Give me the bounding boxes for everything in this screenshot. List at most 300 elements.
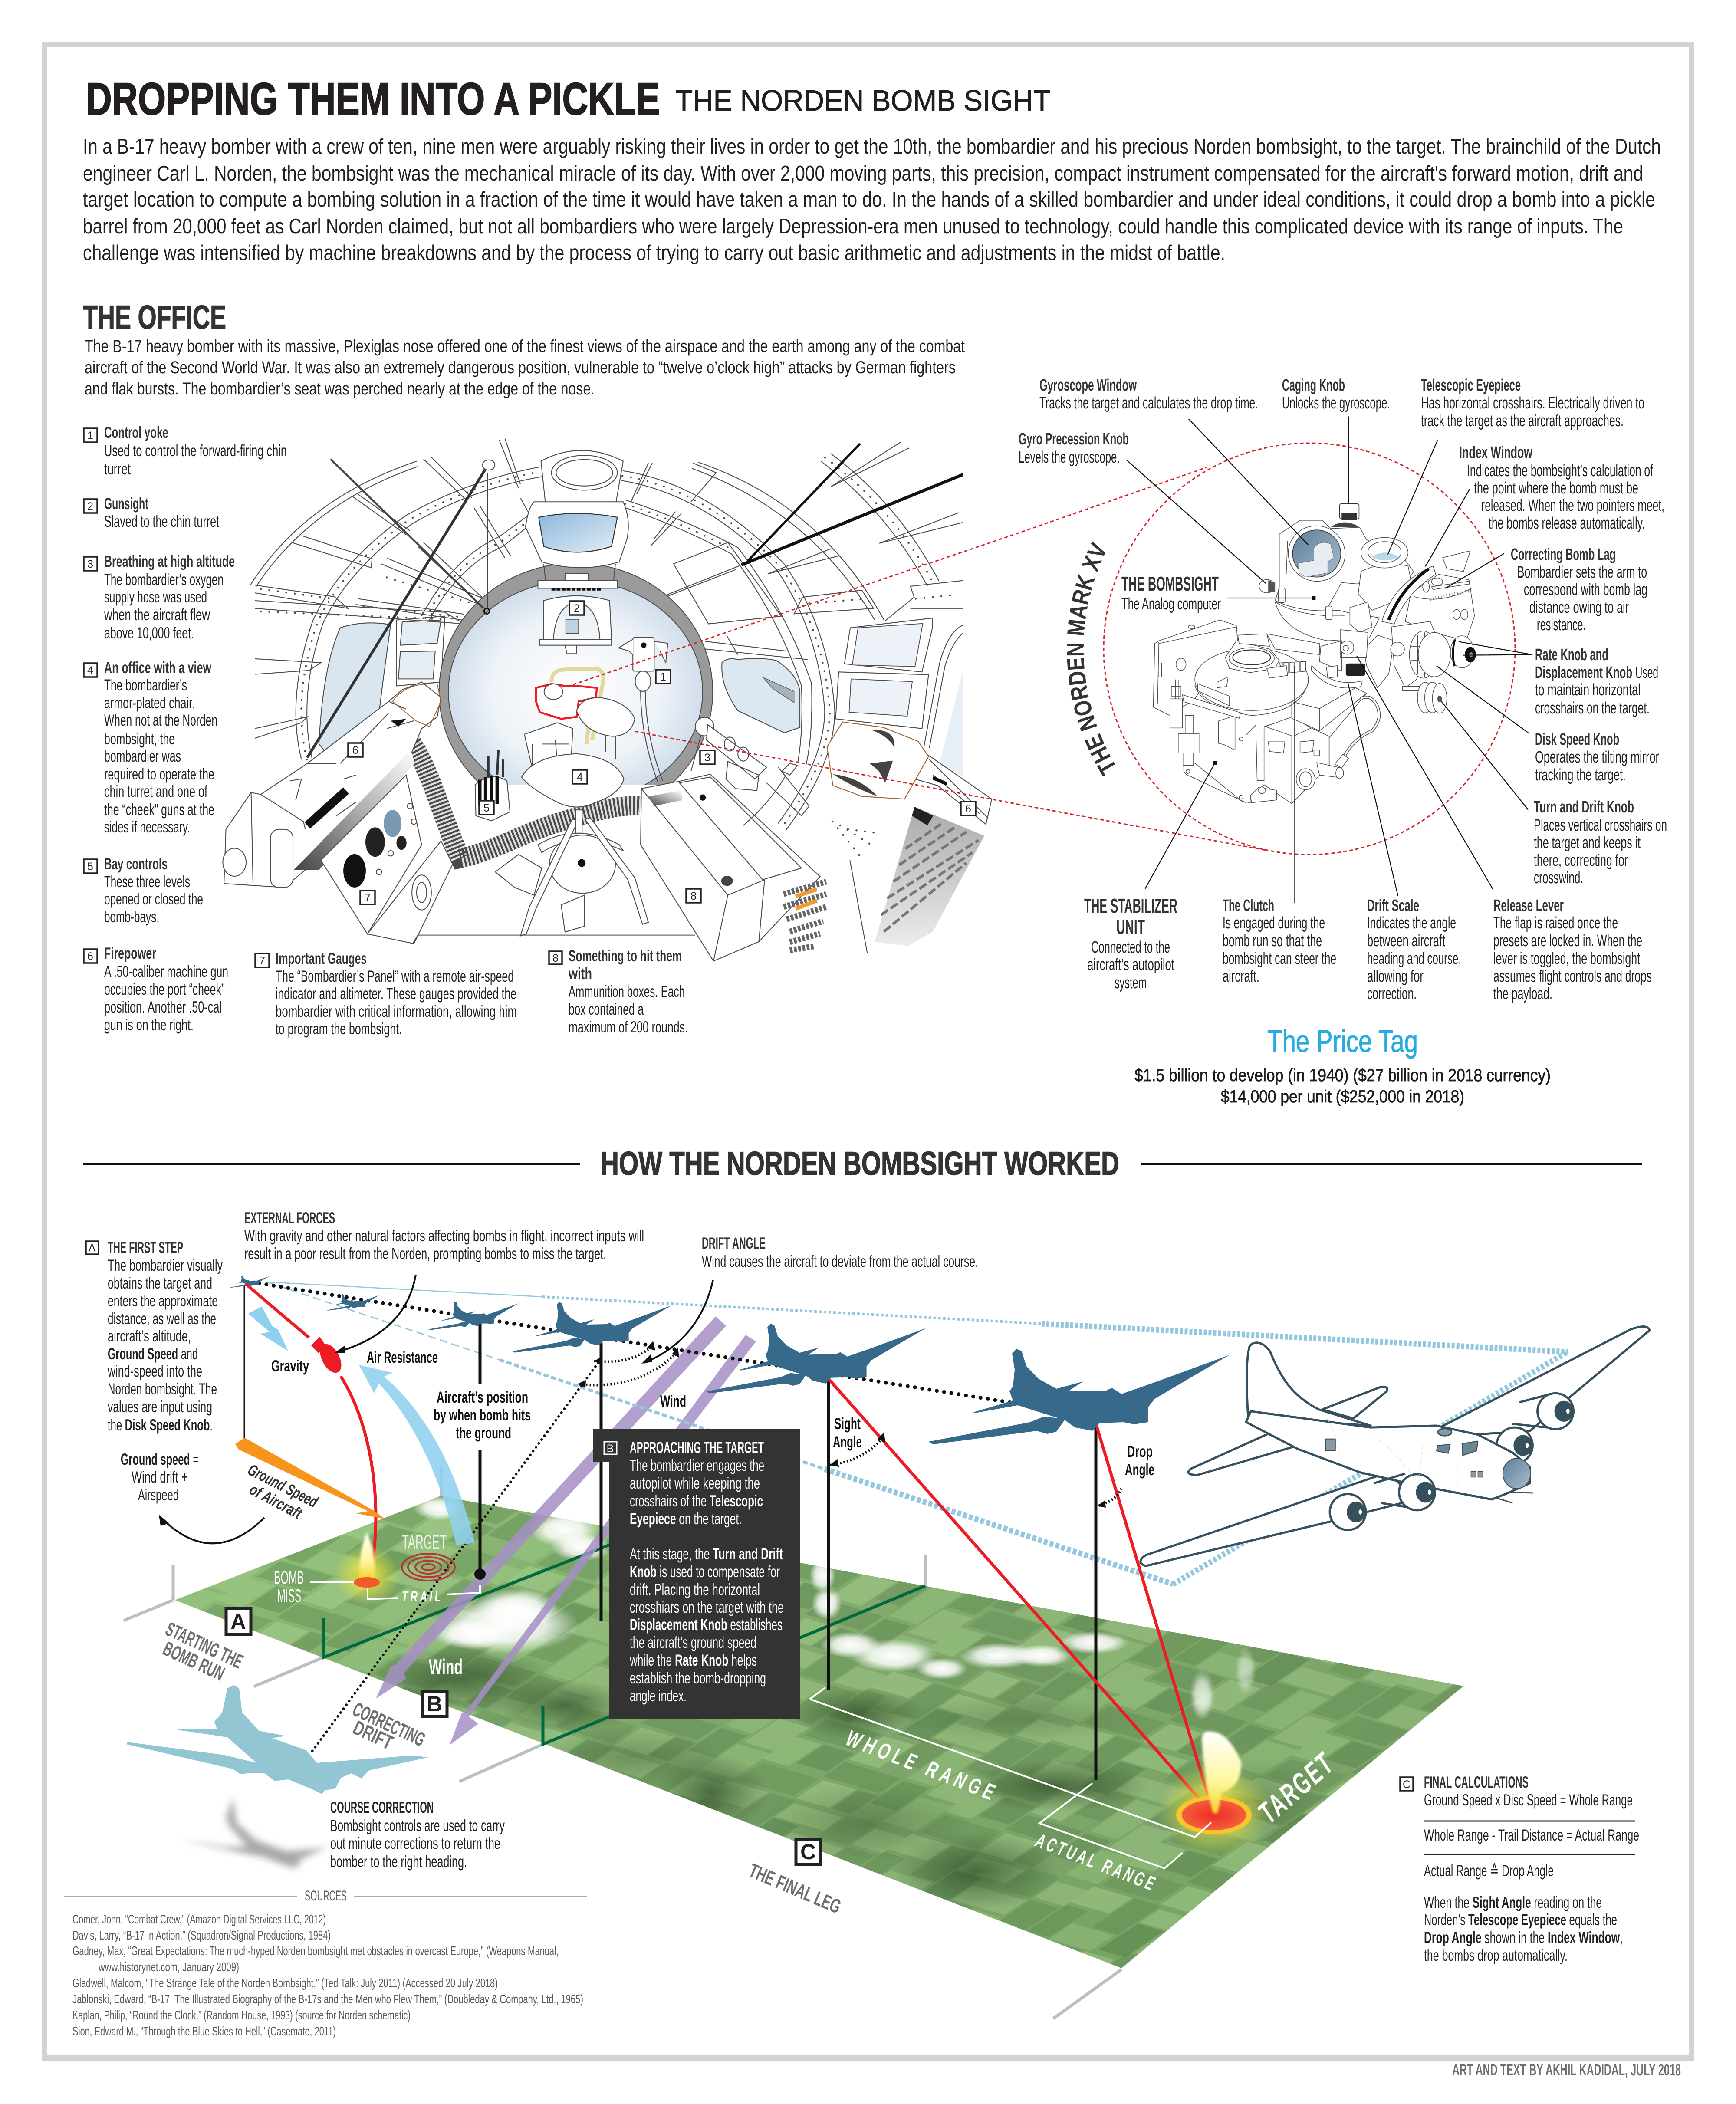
annotation: external forces: EXTERNAL FORCES xyxy=(244,1209,335,1227)
bomb route dotted line xyxy=(259,1283,1042,1407)
legend: important gauges: bombardier with critical information, allowing him xyxy=(276,1003,517,1020)
label: stabilizer unit: UNIT xyxy=(1116,916,1145,938)
angle arcs xyxy=(577,1347,1121,1506)
label: rate knob and displacement knob: Used xyxy=(1635,664,1658,682)
sight lines red xyxy=(829,1379,1214,1815)
callouts on cockpit: 6 xyxy=(352,744,358,756)
stage label c: C xyxy=(800,1840,816,1864)
label: drift scale: allowing for xyxy=(1367,967,1424,986)
label: turn and drift knob: there, correcting for xyxy=(1534,851,1628,870)
stage label a xyxy=(226,1608,251,1634)
callouts on cockpit: 8 xyxy=(690,890,697,902)
bay controls xyxy=(475,777,510,821)
annotation: course correction: bomber to the right heading. xyxy=(330,1853,467,1871)
office text block: The B-17 heavy bomber with its massive, Plexiglas nose offered one of the finest views of the airspace and the earth among any of the combat xyxy=(85,337,965,356)
label: disk speed knob xyxy=(1535,730,1659,784)
legend: breathing: above 10,000 feet. xyxy=(104,624,194,642)
label: release lever: Release Lever xyxy=(1493,897,1564,915)
intro text block xyxy=(83,135,1661,265)
callouts on cockpit: 6 xyxy=(965,803,971,815)
heading: the office: THE OFFICE xyxy=(83,299,226,336)
annotation: drift angle xyxy=(702,1234,978,1270)
label: gyro precession knob xyxy=(1019,430,1129,467)
map text labels xyxy=(274,1531,1341,1896)
price tag heading: The Price Tag xyxy=(1267,1024,1418,1059)
annotation: drift angle: Wind causes the aircraft to deviate from the actual course. xyxy=(702,1253,978,1270)
label: caging knob: Caging Knob xyxy=(1282,376,1345,394)
annotation: final calculations: Drop Angle shown in the Index Window, xyxy=(1424,1929,1623,1946)
plumb lines xyxy=(244,1285,1096,1780)
label: ground speed of aircraft xyxy=(245,1461,321,1523)
seat back xyxy=(577,697,635,736)
intro text block: challenge was intensified by machine breakdowns and by the process of trying to carry out basic arithmetic and adjustments in the midst of battle. xyxy=(83,241,1225,265)
annotation: external forces: result in a poor result from the Norden, prompting bombs to miss the target. xyxy=(244,1245,606,1262)
bomber shadow xyxy=(182,1798,327,1867)
legend: firepower: gun is on the right. xyxy=(104,1016,194,1034)
annotation: final calculations: FINAL CALCULATIONS xyxy=(1424,1773,1529,1791)
label: gyroscope window: Tracks the target and calculates the drop time. xyxy=(1039,394,1258,412)
label: gyroscope window: Gyroscope Window xyxy=(1039,376,1137,394)
box rounds xyxy=(784,881,826,950)
label: stabilizer unit: system xyxy=(1115,974,1147,992)
label: drift scale: between aircraft xyxy=(1367,932,1445,950)
ribs xyxy=(255,439,963,738)
label: stabilizer unit: THE STABILIZER xyxy=(1084,894,1177,917)
legend: something to hit them with: box contained a xyxy=(569,1000,644,1018)
label: drop angle xyxy=(1125,1443,1154,1479)
label: gyro precession knob: Levels the gyroscope. xyxy=(1019,448,1120,467)
floor xyxy=(413,860,867,953)
annotation: the first step: The bombardier visually xyxy=(108,1256,223,1274)
label: the clutch: bombsight can steer the xyxy=(1223,950,1336,968)
cockpit illustration xyxy=(223,439,992,961)
bombsight leader lines xyxy=(1127,417,1532,903)
legend: important gauges: The “Bombardier’s Panel” with a remote air-speed xyxy=(276,967,514,985)
legend: firepower: Firepower xyxy=(104,944,156,962)
label: drift scale: Drift Scale xyxy=(1367,897,1419,915)
panel: approaching the target: angle index. xyxy=(630,1687,687,1705)
curved title: the norden mark xv: THE NORDEN MARK XV xyxy=(1062,539,1122,779)
map: track lines xyxy=(323,1532,925,1744)
panel: approaching the target: drift. Placing the horizontal xyxy=(630,1581,760,1598)
stage label a: A xyxy=(230,1610,246,1634)
main target explosion xyxy=(1159,1669,1272,1855)
label: the bombsight: The Analog computer xyxy=(1121,595,1221,613)
legend: important gauges xyxy=(255,950,517,1038)
clouds on map xyxy=(413,1496,1256,1719)
map text labels: ACTUAL RANGE xyxy=(1032,1829,1160,1896)
bomb trajectory xyxy=(246,1284,376,1582)
legend: something to hit them with: maximum of 200 rounds. xyxy=(569,1018,688,1036)
legend: gunsight: 2 xyxy=(87,500,93,513)
legend: something to hit them with: with xyxy=(568,965,592,983)
sources: Sion, Edward M., “Through the Blue Skies to Hell,” (Casemate, 2011) xyxy=(72,2025,336,2038)
light blue corrected bomber xyxy=(126,1685,428,1794)
label: drift scale: heading and course, xyxy=(1367,950,1461,968)
legend: bay controls: 5 xyxy=(87,861,93,873)
legend: office with a view: bombardier was xyxy=(104,747,181,765)
annotation: final calculations: C xyxy=(1403,1779,1410,1791)
target rings xyxy=(402,1554,455,1581)
legend: firepower: occupies the port “cheek” xyxy=(104,980,225,998)
legend: breathing: The bombardier’s oxygen xyxy=(104,571,224,588)
legend: control yoke xyxy=(84,424,287,478)
label: the clutch: The Clutch xyxy=(1223,897,1274,915)
bomber silhouettes xyxy=(230,1275,1230,1444)
label: correcting bomb lag: correspond with bomb lag xyxy=(1524,581,1647,599)
annotation: the first step: obtains the target and xyxy=(108,1274,212,1292)
annotation: course correction: Bombsight controls are used to carry xyxy=(330,1817,505,1834)
label: sight angle xyxy=(833,1415,862,1451)
sources: SOURCES xyxy=(305,1888,347,1903)
gyro housing xyxy=(1275,520,1414,618)
gunsight xyxy=(538,581,617,588)
legend: breathing: 3 xyxy=(87,558,93,570)
label: stabilizer unit: aircraft’s autopilot xyxy=(1087,956,1174,974)
air resistance arrow xyxy=(359,1365,475,1545)
legend: firepower: 6 xyxy=(87,950,93,963)
price tag figures xyxy=(1134,1066,1551,1106)
nose glass xyxy=(448,581,703,803)
office text block: aircraft of the Second World War. It was also an extremely dangerous position, vulnerable to “twelve o’clock high” attacks by German fighters xyxy=(85,358,956,377)
callouts on cockpit: 7 xyxy=(365,892,371,904)
switches and fittings xyxy=(1268,740,1319,756)
label: the bombsight xyxy=(1121,572,1221,613)
right belt xyxy=(875,807,984,946)
stabilizer body xyxy=(1184,688,1367,804)
label: drift scale: Indicates the angle xyxy=(1367,914,1456,932)
panel: approaching the target: establish the bomb-dropping xyxy=(630,1669,766,1687)
angle arrowheads xyxy=(577,1341,1106,1508)
label: aircraft position: Aircraft’s position xyxy=(437,1388,528,1406)
annotation: course correction: COURSE CORRECTION xyxy=(330,1798,434,1816)
left gun xyxy=(224,682,441,888)
legend: something to hit them with: 8 xyxy=(552,952,559,964)
legend: office with a view: bombsight, the xyxy=(104,730,175,748)
panel: approaching the target: At this stage, the Turn and Drift xyxy=(630,1545,783,1563)
stage name: starting the bomb run: STARTING THE xyxy=(162,1617,247,1673)
subtitle: THE NORDEN BOMB SIGHT xyxy=(675,84,1051,117)
lag dial xyxy=(1405,574,1475,641)
rate and disc knobs xyxy=(1410,631,1437,678)
label: telescopic eyepiece: track the target as the aircraft approaches. xyxy=(1421,412,1624,430)
annotation: ground speed formula xyxy=(121,1450,199,1504)
price tag figures: $1.5 billion to develop (in 1940) ($27 billion in 2018 currency) xyxy=(1134,1066,1551,1085)
label: correcting bomb lag: distance owing to air xyxy=(1529,598,1629,617)
legend: firepower: position. Another .50-cal xyxy=(104,998,222,1016)
legend: bay controls: bomb-bays. xyxy=(104,908,159,926)
floor mask xyxy=(441,785,716,823)
stool xyxy=(538,833,623,852)
annotation: the first step: wind-speed into the xyxy=(107,1362,202,1380)
ground speed arrow xyxy=(235,1438,385,1519)
panel: approaching the target: Displacement Knob establishes xyxy=(630,1616,783,1634)
map text labels: MISS xyxy=(277,1585,301,1606)
right gun and grips xyxy=(889,752,992,824)
label: turn and drift knob xyxy=(1534,798,1667,887)
stage label b: B xyxy=(427,1692,442,1716)
label: drop angle: Drop xyxy=(1127,1443,1153,1460)
label: drift scale: correction. xyxy=(1367,985,1417,1003)
section heading: how it worked: HOW THE NORDEN BOMBSIGHT WORKED xyxy=(601,1145,1119,1182)
label: release lever: The flap is raised once the xyxy=(1493,914,1618,932)
callouts on cockpit: 2 xyxy=(574,602,580,615)
gravity arrow xyxy=(248,1306,288,1351)
annotation: ground speed formula: Wind drift + xyxy=(132,1468,188,1486)
label: ground speed of aircraft: of Aircraft xyxy=(247,1480,305,1523)
bombsight illustration xyxy=(1153,504,1476,804)
legend: office with a view: sides if necessary. xyxy=(104,818,190,836)
annotation: the first step: aircraft’s altitude, xyxy=(108,1327,191,1345)
stage name: correcting drift xyxy=(349,1698,429,1754)
wind bands xyxy=(376,1316,756,1745)
norden frame xyxy=(552,668,603,744)
sources xyxy=(64,1888,587,2038)
label: release lever: lever is toggled, the bombsight xyxy=(1493,950,1640,968)
legend: something to hit them with: Something to hit them xyxy=(569,947,682,965)
annotation: drift angle: DRIFT ANGLE xyxy=(702,1234,766,1252)
label: the clutch xyxy=(1223,897,1336,986)
legend: office with a view: The bombardier’s xyxy=(104,676,187,694)
bomb miss explosion xyxy=(335,1532,400,1606)
annotation: the first step xyxy=(86,1239,223,1434)
legend: important gauges: 7 xyxy=(259,955,265,967)
label: index window: the bombs release automatically. xyxy=(1489,514,1645,533)
label: aircraft position xyxy=(434,1388,531,1442)
label: ground speed of aircraft: Ground Speed xyxy=(245,1461,321,1511)
legend: breathing xyxy=(84,552,235,642)
sources: Gadney, Max, “Great Expectations: The much-hyped Norden bombsight met obstacles in overcast Europe,” (Weapons Manual, xyxy=(72,1944,559,1958)
ammo belt xyxy=(410,740,641,858)
stage name: starting the bomb run xyxy=(160,1617,247,1685)
annotation: the first step: A xyxy=(89,1242,96,1254)
legend: bay controls: opened or closed the xyxy=(104,890,203,908)
legend: gunsight xyxy=(84,495,219,530)
label: turn and drift knob: Turn and Drift Knob xyxy=(1534,798,1634,816)
annotation: external forces xyxy=(244,1209,644,1262)
legend: something to hit them with: Ammunition boxes. Each xyxy=(569,983,685,1000)
label: gyroscope window xyxy=(1039,376,1258,412)
legend: breathing: supply hose was used xyxy=(104,588,207,606)
label: index window: Index Window xyxy=(1459,444,1532,462)
sources: www.historynet.com, January 2009) xyxy=(98,1960,239,1974)
correction dotted line xyxy=(312,1359,601,1752)
map text labels: Wind xyxy=(429,1655,463,1679)
bomb xyxy=(311,1337,346,1376)
map text labels: TARGET xyxy=(402,1531,447,1553)
annotation: final calculations: Norden’s Telescope Eyepiece equals the xyxy=(1424,1911,1617,1929)
annotation: course correction: out minute corrections to return the xyxy=(330,1834,500,1852)
panel: approaching the target: The bombardier engages the xyxy=(630,1456,764,1474)
top port xyxy=(541,450,623,510)
center block xyxy=(1350,602,1372,632)
label: stabilizer unit xyxy=(1084,894,1177,992)
panel: approaching the target: crosshairs of the Telescopic xyxy=(630,1492,763,1510)
annotation: final calculations xyxy=(1400,1773,1639,1964)
label: aircraft position: by when bomb hits xyxy=(434,1406,531,1424)
legend: gunsight: Gunsight xyxy=(104,495,148,513)
label: correcting bomb lag xyxy=(1511,546,1647,634)
annotation: final calculations: When the Sight Angle reading on the xyxy=(1424,1894,1602,1911)
annotation: final calculations: Ground Speed x Disc Speed = Whole Range xyxy=(1424,1791,1633,1809)
map text labels: TRAIL xyxy=(402,1588,443,1605)
ammo box xyxy=(641,774,820,961)
panel: approaching the target: B xyxy=(607,1443,614,1455)
callouts on cockpit: 3 xyxy=(704,752,710,764)
legend: office with a view: chin turret and one of xyxy=(104,782,207,800)
panel: approaching the target xyxy=(593,1429,800,1719)
leader lines on map xyxy=(310,1582,1211,1868)
legend: bay controls: Bay controls xyxy=(104,855,168,873)
legend: something to hit them with xyxy=(549,947,688,1036)
label: correcting bomb lag: Bombardier sets the arm to xyxy=(1517,563,1647,582)
label: gyro precession knob: Gyro Precession Knob xyxy=(1019,430,1129,448)
label: rate knob and displacement knob: crosshairs on the target. xyxy=(1535,699,1650,717)
stage name: the final leg: THE FINAL LEG xyxy=(746,1859,845,1918)
label: sight angle: Sight xyxy=(834,1415,861,1433)
price tag figures: $14,000 per unit ($252,000 in 2018) xyxy=(1221,1087,1464,1106)
label: rate knob and displacement knob: to maintain horizontal xyxy=(1535,681,1641,699)
legend: office with a view: required to operate the xyxy=(104,765,214,783)
label: index window xyxy=(1459,444,1664,533)
legend: important gauges: Important Gauges xyxy=(276,950,367,967)
label: the bombsight: THE BOMBSIGHT xyxy=(1121,572,1219,595)
curved arrowheads xyxy=(159,1345,652,1526)
label: caging knob xyxy=(1282,376,1390,412)
label: release lever: the payload. xyxy=(1493,985,1552,1003)
side windows xyxy=(319,623,391,756)
legend: important gauges: indicator and altimeter. These gauges provided the xyxy=(276,985,516,1003)
gyro bowl xyxy=(1275,602,1383,641)
legend: bay controls xyxy=(84,855,203,926)
heavy struts xyxy=(331,459,483,608)
label: telescopic eyepiece xyxy=(1421,376,1644,430)
plumb end marker xyxy=(474,1568,486,1580)
label: correcting bomb lag: resistance. xyxy=(1537,616,1586,634)
legend: breathing: when the aircraft flew xyxy=(104,606,210,624)
panel: approaching the target: Eyepiece on the target. xyxy=(630,1510,742,1528)
panel: approaching the target: autopilot while keeping the xyxy=(630,1474,760,1492)
stabilizer rear panel xyxy=(1153,620,1238,716)
rivets xyxy=(261,457,957,860)
callouts on cockpit: 1 xyxy=(660,671,666,683)
label: the clutch: aircraft. xyxy=(1223,967,1259,986)
legend: bay controls: These three levels xyxy=(104,873,190,891)
legend: office with a view: When not at the Norden xyxy=(104,711,217,729)
panel: approaching the target: the aircraft’s ground speed xyxy=(630,1634,756,1651)
map axis ticks xyxy=(124,1466,1121,2019)
annotation: the first step: Norden bombsight. The xyxy=(108,1380,217,1398)
hanging rods xyxy=(1170,680,1235,766)
label: the clutch: Is engaged during the xyxy=(1223,914,1325,932)
eyepiece xyxy=(1358,564,1414,610)
label: release lever xyxy=(1493,897,1652,1003)
yoke xyxy=(641,690,663,783)
label: sight angle: Angle xyxy=(833,1433,862,1451)
annotation: the first step: values are input using xyxy=(108,1398,212,1416)
main window ring xyxy=(439,563,713,820)
map text labels: WHOLE RANGE xyxy=(843,1726,1002,1807)
label: turn and drift knob: the target and keeps it xyxy=(1534,834,1641,852)
annotation: external forces: With gravity and other natural factors affecting bombs in flight, incorrect inputs will xyxy=(244,1227,644,1245)
labels: forces: Gravity xyxy=(271,1357,309,1375)
annotation: course correction xyxy=(330,1798,505,1871)
label: stabilizer unit: Connected to the xyxy=(1091,938,1170,957)
label: correcting bomb lag: Correcting Bomb Lag xyxy=(1511,546,1616,564)
panel: approaching the target: while the Rate Knob helps xyxy=(629,1651,757,1669)
annotation: ground speed formula: Ground speed = xyxy=(121,1450,199,1468)
legend: office with a view: 4 xyxy=(87,664,93,677)
label: release lever: presets are locked in. When the xyxy=(1493,932,1642,950)
callouts on cockpit: 5 xyxy=(483,802,490,814)
callouts on cockpit: 4 xyxy=(577,771,583,783)
label: caging knob: Unlocks the gyroscope. xyxy=(1282,394,1390,412)
title: DROPPING THEM INTO A PICKLE xyxy=(86,74,660,125)
label: drift scale xyxy=(1367,897,1461,1003)
annotation: final calculations: Actual Range ≙ Drop Angle xyxy=(1424,1862,1554,1880)
sources: Comer, John, “Combat Crew,” (Amazon Digital Services LLC, 2012) xyxy=(72,1913,326,1926)
stage name: starting the bomb run: BOMB RUN xyxy=(160,1637,228,1685)
legend: gunsight: Slaved to the chin turret xyxy=(104,513,219,530)
map text labels: TARGET xyxy=(1252,1746,1341,1830)
legend: firepower xyxy=(84,944,228,1034)
legend: office with a view: armor-plated chair. xyxy=(104,694,195,712)
legend: control yoke: turret xyxy=(104,460,131,478)
panel: approaching the target: APPROACHING THE TARGET xyxy=(630,1439,764,1456)
label: the clutch: bomb run so that the xyxy=(1223,932,1322,950)
annotation: the first step: distance, as well as the xyxy=(108,1310,216,1328)
legend: office with a view: the “cheek” guns at the xyxy=(104,801,214,819)
labels: forces xyxy=(271,1348,686,1410)
annotation: the first step: THE FIRST STEP xyxy=(108,1239,183,1256)
stage name: correcting drift: DRIFT xyxy=(350,1716,397,1754)
stage label c xyxy=(796,1839,821,1864)
labels: forces: Air Resistance xyxy=(367,1348,438,1366)
label: release lever: assumes flight controls and drops xyxy=(1493,967,1652,986)
shell arcs xyxy=(250,454,939,830)
small norden in red xyxy=(536,684,597,719)
panel: approaching the target: Knob is used to compensate for xyxy=(630,1563,780,1581)
legend: breathing: Breathing at high altitude xyxy=(104,552,235,570)
label: rate knob and displacement knob: Displacement Knob xyxy=(1535,664,1632,682)
sources: Kaplan, Philip, “Round the Clock,” (Random House, 1993) (source for Norden schematic) xyxy=(72,2009,411,2022)
curved arrows xyxy=(161,1275,713,1543)
office text block: and flak bursts. The bombardier’s seat was perched nearly at the edge of the nose. xyxy=(85,379,595,398)
legend: office with a view: An office with a view xyxy=(104,659,211,677)
index scale xyxy=(1382,566,1436,624)
panel 3 xyxy=(695,717,714,736)
label: turn and drift knob: crosswind. xyxy=(1534,869,1583,887)
legend: control yoke: Used to control the forward-firing chin xyxy=(104,442,287,460)
labels: forces: Wind xyxy=(660,1392,686,1410)
sources: Gladwell, Malcom, “The Strange Tale of the Norden Bombsight,” (Ted Talk: July 2011) (Accessed 20 July 2018) xyxy=(72,1976,498,1990)
label: rate knob and displacement knob xyxy=(1535,646,1658,717)
label: disk speed knob: Disk Speed Knob xyxy=(1535,730,1619,749)
white b-17 illustration xyxy=(1141,1327,1650,1566)
turntable xyxy=(1195,648,1309,710)
sources: Jablonski, Edward, “B-17: The Illustrated Biography of the B-17s and the Men who Flew Them,” (Doubleday & Company, Ltd., 1965) xyxy=(72,1992,583,2006)
stage name: correcting drift: CORRECTING xyxy=(349,1698,429,1751)
label: rate knob and displacement knob: Rate Knob and xyxy=(1535,646,1608,664)
zoom circle and connector xyxy=(567,443,1515,855)
label: drop angle: Angle xyxy=(1125,1461,1154,1479)
label: aircraft position: the ground xyxy=(456,1424,511,1442)
office text block xyxy=(85,337,965,398)
panel: approaching the target: crosshiars on the target with the xyxy=(630,1598,784,1616)
dashed flight frame xyxy=(267,1282,1568,1584)
annotation: the first step: the Disk Speed Knob. xyxy=(108,1416,213,1434)
callouts on cockpit xyxy=(348,601,976,904)
